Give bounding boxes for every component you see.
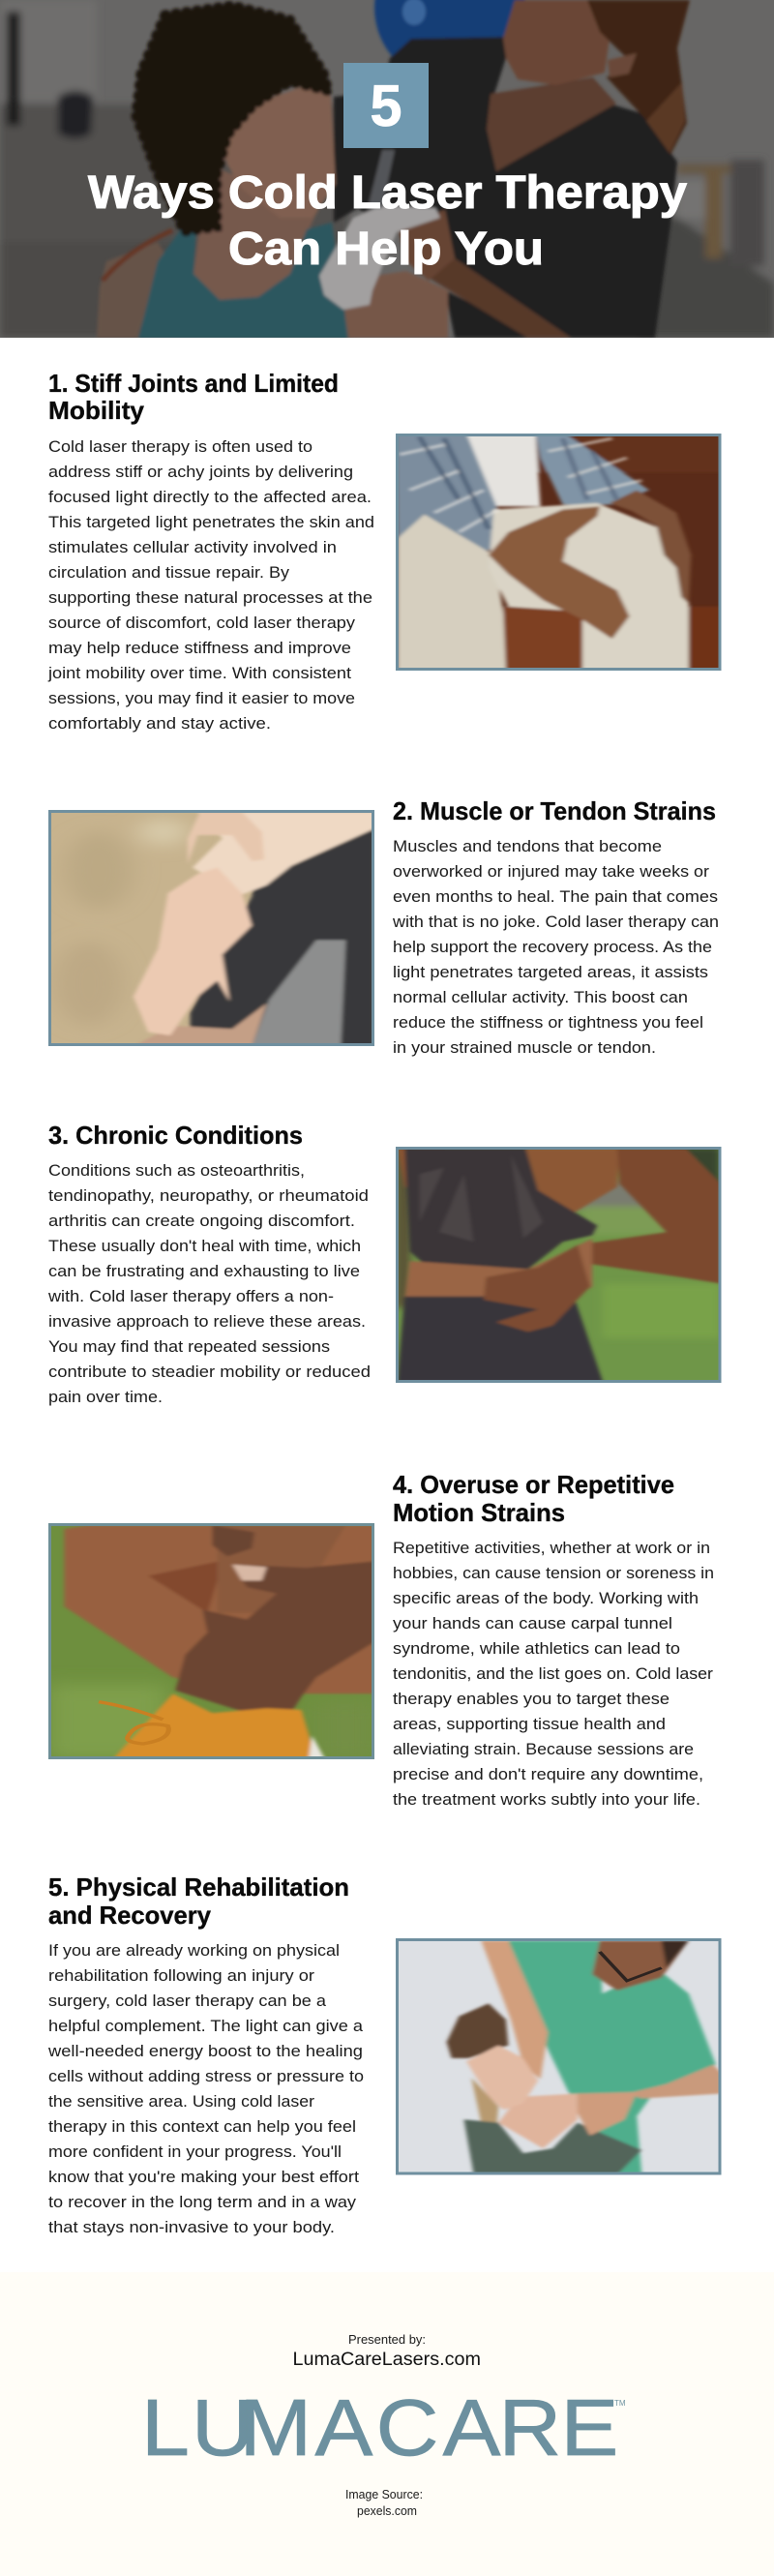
body text 5: helpful complement. The light can give a: [48, 2018, 364, 2035]
body text 4: areas, supporting tissue health and: [393, 1716, 666, 1733]
image source: Image Source:: [345, 2487, 423, 2501]
footer panel: [0, 2272, 774, 2576]
body text 4: [393, 1540, 714, 1809]
body text 3: Conditions such as osteoarthritis,: [48, 1162, 305, 1180]
body text 4: syndrome, while athletics can lead to: [393, 1640, 680, 1658]
heading 5: [48, 1872, 349, 1930]
logo: LUMACARE: [141, 2383, 618, 2472]
photo: hands gripping ankle: [48, 1523, 374, 1759]
heading 1: Mobility: [48, 396, 145, 425]
body text 1: source of discomfort, cold laser therapy: [48, 614, 356, 632]
body text 3: These usually don't heal with time, which: [48, 1238, 361, 1255]
heading 4: Motion Strains: [393, 1498, 565, 1527]
body text 1: supporting these natural processes at the: [48, 589, 372, 607]
photo: hand on lower back: [396, 1147, 722, 1383]
body text 2: overworked or injured may take weeks or: [393, 863, 710, 881]
body text 1: may help reduce stiffness and improve: [48, 640, 351, 657]
body text 4: Repetitive activities, whether at work or in: [393, 1540, 710, 1557]
heading 2: 2. Muscle or Tendon Strains: [393, 796, 716, 825]
heading 4: 4. Overuse or Repetitive: [393, 1470, 674, 1499]
panel: overuse strains: [48, 1470, 714, 1809]
logo: TM: [614, 2399, 626, 2408]
panel: muscle strains: [48, 796, 719, 1057]
heading 5: and Recovery: [48, 1901, 212, 1930]
heading 1: 1. Stiff Joints and Limited: [48, 369, 339, 398]
body text 5: [47, 1942, 364, 2236]
body text 5: surgery, cold laser therapy can be a: [48, 1992, 327, 2010]
heading 3: 3. Chronic Conditions: [48, 1121, 303, 1150]
body text 3: can be frustrating and exhausting to live: [48, 1263, 360, 1280]
body text 1: This targeted light penetrates the skin and: [48, 514, 374, 531]
body text 3: pain over time.: [48, 1389, 163, 1406]
body text 4: tendonitis, and the list goes on. Cold laser: [393, 1665, 714, 1683]
body text 1: comfortably and stay active.: [48, 715, 271, 733]
body text 4: alleviating strain. Because sessions are: [393, 1741, 694, 1758]
body text 1: [47, 438, 374, 733]
website: LumaCareLasers.com: [292, 2350, 481, 2370]
panel: physical rehabilitation: [47, 1872, 722, 2236]
heading 4: [393, 1470, 674, 1527]
number badge: 5: [370, 74, 402, 138]
body text 5: rehabilitation following an injury or: [48, 1967, 315, 1985]
header photo: therapist treating a patient's shoulder: [0, 0, 774, 338]
title: Ways Cold Laser Therapy: [88, 167, 687, 219]
body text 4: specific areas of the body. Working with: [393, 1590, 699, 1607]
body text 4: therapy enables you to target these: [393, 1691, 670, 1708]
body text 2: even months to heal. The pain that comes: [393, 888, 718, 906]
body text 2: [392, 838, 719, 1057]
body text 3: You may find that repeated sessions: [48, 1338, 330, 1356]
image source: pexels.com: [357, 2503, 417, 2518]
body text 1: stimulates cellular activity involved in: [48, 539, 337, 556]
photo: hand stretching wrist: [48, 810, 374, 1046]
body text 4: your hands can cause carpal tunnel: [393, 1615, 672, 1632]
body text 5: know that you're making your best effort: [48, 2169, 359, 2186]
body text 3: with. Cold laser therapy offers a non-: [47, 1288, 334, 1305]
body text 2: help support the recovery process. As the: [393, 939, 712, 956]
body text 3: tendinopathy, neuropathy, or rheumatoid: [48, 1187, 369, 1205]
body text 5: more confident in your progress. You'll: [48, 2143, 342, 2161]
title: [88, 167, 687, 275]
body text 2: light penetrates targeted areas, it assists: [393, 964, 708, 981]
body text 5: that stays non-invasive to your body.: [48, 2219, 335, 2236]
body text 4: precise and don't require any downtime,: [393, 1766, 703, 1783]
body text 2: normal cellular activity. This boost can: [393, 989, 688, 1006]
body text 1: joint mobility over time. With consistent: [47, 665, 351, 682]
body text 5: to recover in the long term and in a way: [48, 2194, 357, 2211]
body text 3: arthritis can create ongoing discomfort.: [48, 1213, 355, 1230]
presented by: Presented by:: [348, 2332, 426, 2347]
number badge: [343, 63, 429, 148]
body text 5: well-needed energy boost to the healing: [47, 2043, 363, 2060]
body text 5: the sensitive area. Using cold laser: [48, 2093, 315, 2111]
body text 1: address stiff or achy joints by delivering: [48, 464, 353, 481]
body text 2: in your strained muscle or tendon.: [393, 1039, 656, 1057]
body text 3: contribute to steadier mobility or reduced: [48, 1363, 371, 1381]
body text 2: Muscles and tendons that become: [393, 838, 662, 855]
body text 3: [47, 1162, 371, 1406]
heading 1: [48, 369, 339, 425]
body text 5: therapy in this context can help you feel: [48, 2118, 356, 2136]
body text 2: with that is no joke. Cold laser therapy can: [392, 914, 719, 931]
heading 5: 5. Physical Rehabilitation: [48, 1872, 349, 1902]
photo: practitioner stretching patient's neck: [396, 1938, 722, 2175]
body text 1: circulation and tissue repair. By: [48, 564, 290, 582]
header panel: [0, 0, 774, 339]
body text 5: If you are already working on physical: [48, 1942, 340, 1960]
body text 4: hobbies, can cause tension or soreness in: [393, 1565, 714, 1582]
panel: stiff joints: [47, 369, 721, 733]
body text 3: invasive approach to relieve these areas.: [48, 1313, 366, 1331]
body text 1: Cold laser therapy is often used to: [48, 438, 313, 456]
body text 5: cells without adding stress or pressure to: [48, 2068, 364, 2085]
photo: hands on knee: [396, 434, 722, 672]
panel: chronic conditions: [47, 1121, 722, 1406]
body text 2: reduce the stiffness or tightness you feel: [393, 1014, 703, 1032]
title: Can Help You: [228, 224, 544, 275]
body text 1: sessions, you may find it easier to move: [48, 690, 355, 707]
body text 1: focused light directly to the affected area.: [48, 489, 372, 506]
body text 4: the treatment works subtly into your life.: [393, 1791, 700, 1809]
image source: [345, 2487, 423, 2518]
